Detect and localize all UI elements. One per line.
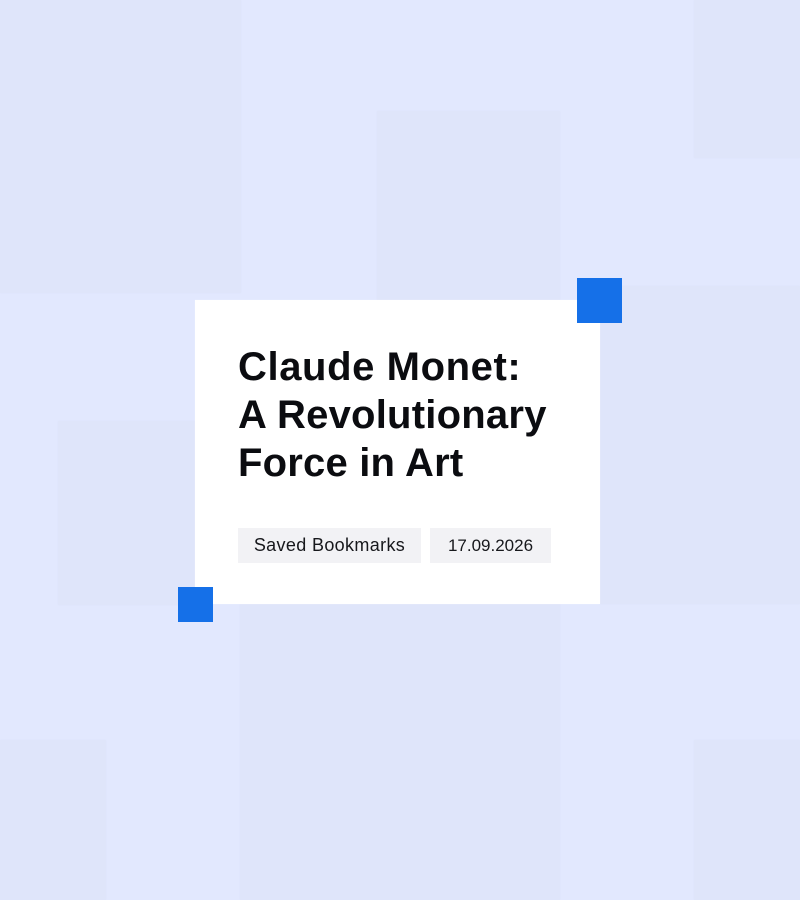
heading bbox=[238, 345, 547, 485]
accent square: top right bbox=[577, 278, 622, 323]
accent square: bottom left bbox=[178, 587, 213, 622]
background panel: middle left bbox=[58, 421, 195, 605]
heading: A Revolutionary bbox=[238, 393, 547, 437]
background panel: bottom left bbox=[0, 740, 106, 900]
background panel: bottom centre bbox=[240, 604, 560, 900]
background panel: top centre bbox=[377, 111, 560, 300]
heading: Claude Monet: bbox=[238, 345, 521, 389]
tag: saved bookmarks bbox=[238, 528, 421, 563]
panel: title card bbox=[195, 300, 600, 604]
background panel: middle right bbox=[600, 286, 800, 604]
background panel: top right bbox=[694, 0, 800, 158]
background panel: bottom right bbox=[694, 740, 800, 900]
tag: saved bookmarks: Saved Bookmarks bbox=[254, 535, 405, 555]
background panel: top left bbox=[0, 0, 241, 293]
tag: date bbox=[430, 528, 551, 563]
tag: date: 17.09.2026 bbox=[448, 536, 533, 555]
heading: Force in Art bbox=[238, 441, 463, 485]
